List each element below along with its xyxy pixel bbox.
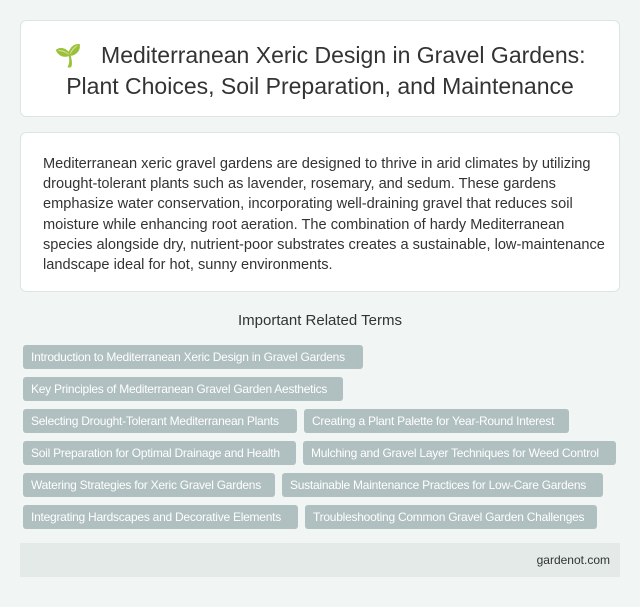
footer — [20, 543, 620, 577]
text: Integrating Hardscapes and Decorative Elements — [31, 510, 281, 524]
text: Introduction to Mediterranean Xeric Design in Gravel Gardens — [31, 350, 345, 364]
description card: emphasize water conservation, incorporating well-draining gravel that reduces soil — [43, 196, 573, 212]
text: Creating a Plant Palette for Year-Round Interest — [312, 414, 554, 428]
title card: 🌱 Mediterranean Xeric Design in Gravel Gardens: — [54, 42, 586, 68]
text: Soil Preparation for Optimal Drainage and Health — [31, 446, 280, 460]
text: Troubleshooting Common Gravel Garden Challenges — [313, 510, 584, 524]
tags — [23, 345, 616, 529]
footer: gardenot.com — [537, 553, 610, 567]
text: Watering Strategies for Xeric Gravel Gardens — [31, 478, 261, 492]
title card: Plant Choices, Soil Preparation, and Maintenance — [66, 73, 574, 99]
description card: species alongside dry, nutrient-poor substrates creates a sustainable, low-maintenance — [43, 237, 605, 253]
heading: related terms: Important Related Terms — [238, 312, 402, 329]
description card — [20, 132, 620, 292]
title card — [20, 20, 620, 117]
text: Mulching and Gravel Layer Techniques for Weed Control — [311, 446, 599, 460]
description card: Mediterranean xeric gravel gardens are designed to thrive in arid climates by utilizing — [43, 156, 591, 172]
description card: landscape ideal for hot, sunny environments. — [43, 257, 333, 273]
text: Sustainable Maintenance Practices for Low-Care Gardens — [290, 478, 586, 492]
text: Key Principles of Mediterranean Gravel Garden Aesthetics — [31, 382, 327, 396]
description card: drought-tolerant plants such as lavender, rosemary, and sedum. These gardens — [43, 176, 556, 192]
description card: moisture while enhancing root aeration. The combination of hardy Mediterranean — [43, 217, 564, 233]
text: Selecting Drought-Tolerant Mediterranean Plants — [31, 414, 279, 428]
